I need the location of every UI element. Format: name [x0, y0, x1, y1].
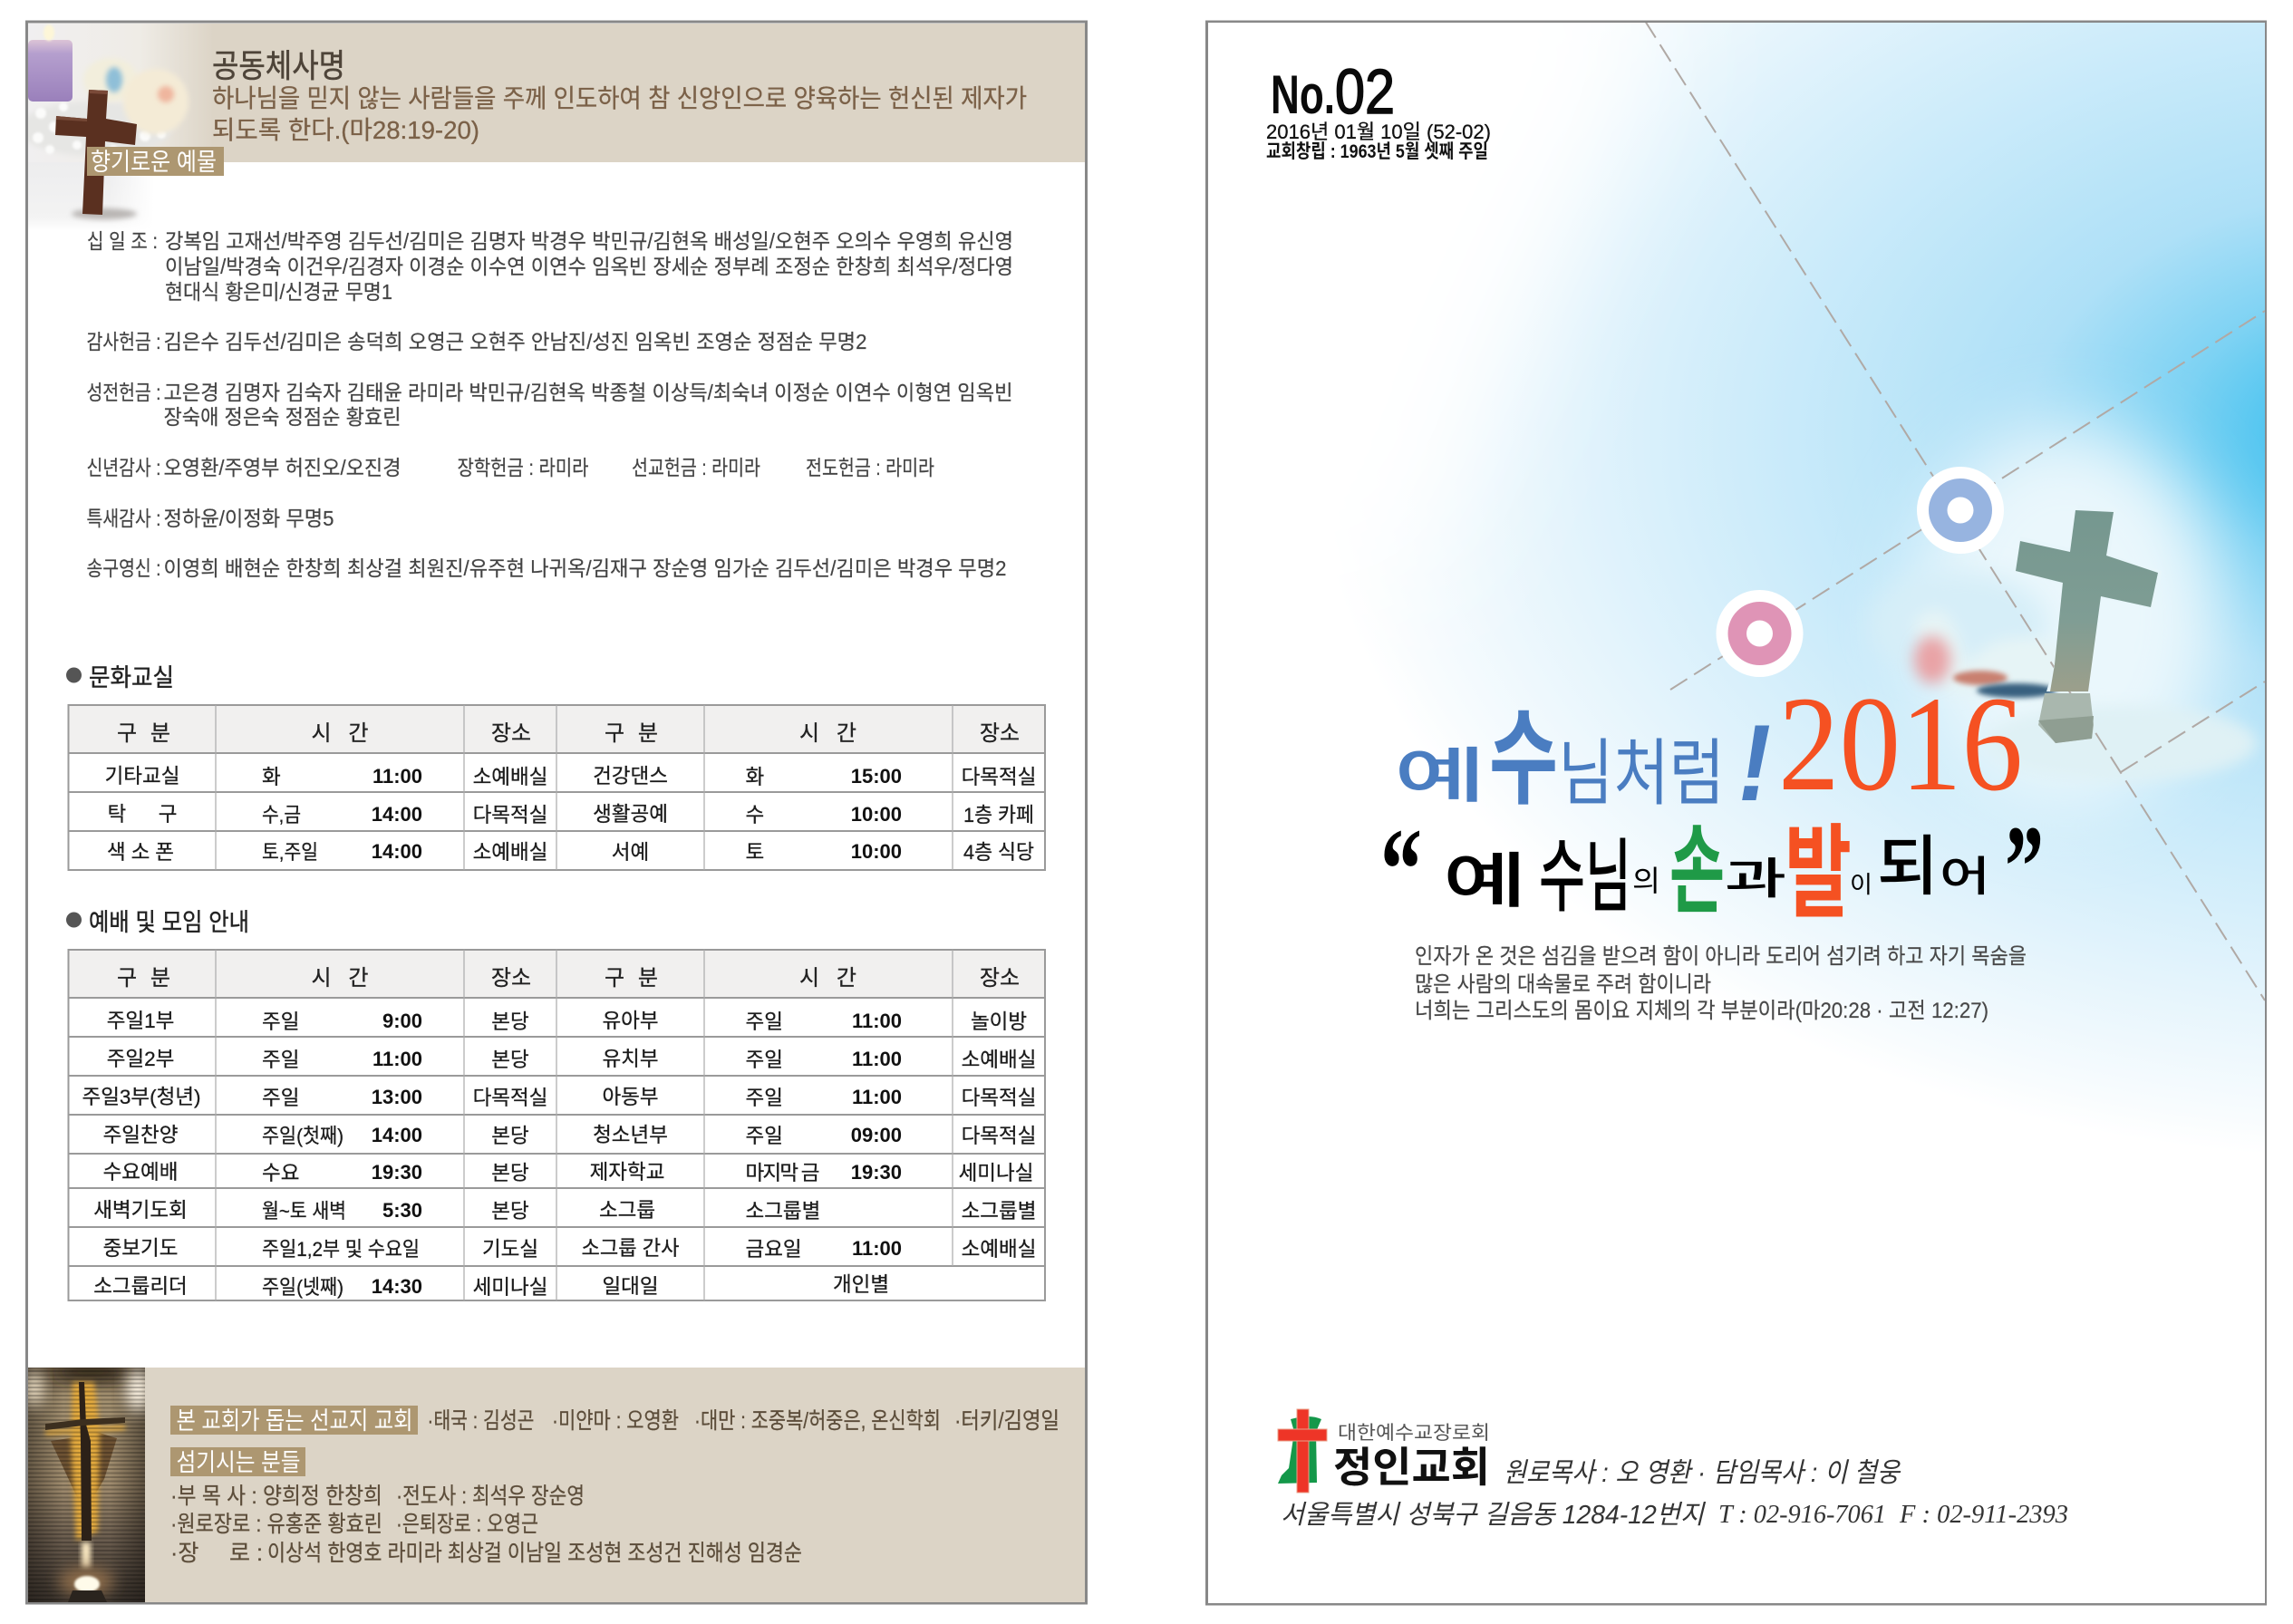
table row: 탁구: 수,금: [262, 804, 301, 826]
table header row: 구 분: [117, 966, 170, 991]
table row: 주일2부: 11:00: [372, 1048, 422, 1070]
text: address and contact: [1281, 1500, 2068, 1530]
table row: 소그룹리더: 주일(넷째): [262, 1276, 343, 1299]
table row: 색소폰: 10:00: [851, 840, 902, 863]
tag: 본 교회가 돕는 선교지 교회: 본 교회가 돕는 선교지 교회: [176, 1407, 413, 1435]
text block: offering names: 정하윤/이정화 무명5: [163, 507, 334, 530]
text: address and contact: 서울특별시 성북구 길음동 1284-12번지: [1281, 1501, 1706, 1530]
table row: 주일3부(청년): 다목적실: [473, 1087, 547, 1109]
table row: 중보기도: 11:00: [852, 1237, 902, 1260]
table row: 주일3부(청년): [82, 1086, 1036, 1109]
table row: 주일1부: 주일: [262, 1010, 299, 1033]
table row: 주일2부: 본당: [491, 1049, 529, 1071]
church denomination: 대한예수교장로회: [1338, 1423, 1490, 1444]
text block: offering names: 십 일 조 :: [87, 229, 158, 253]
table row: 주일1부: 주일1부: [107, 1010, 174, 1032]
table row: 탁구: 10:00: [851, 803, 902, 826]
dashed lines: [1645, 21, 2265, 1000]
table header row: 시 간: [312, 966, 368, 991]
table row: 주일1부: 주일: [745, 1010, 783, 1033]
table row: 탁구: 탁 구: [107, 803, 178, 826]
table row: 주일3부(청년): 아동부: [602, 1086, 659, 1108]
table row: 주일1부: 9:00: [382, 1010, 422, 1032]
subtitle: 예수님의 손과 발이 되어: 의: [1632, 858, 1660, 900]
table row: 색소폰: 토: [745, 841, 764, 864]
text: issue date: 교회창립 : 1963년 5월 셋째 주일: [1266, 141, 1488, 162]
table row: 색소폰: 토,주일: [262, 841, 318, 864]
table: 예배 및 모임 안내: [69, 950, 1045, 1300]
table row: 수요예배: [103, 1161, 1033, 1184]
table row: 수요예배: 수요: [262, 1162, 299, 1184]
table row: 색소폰: [107, 840, 1034, 864]
table row: 새벽기도회: 5:30: [382, 1199, 422, 1222]
table row: 주일찬양: 주일(첫째): [262, 1125, 343, 1147]
table row: 기타교실: 건강댄스: [593, 765, 668, 788]
panel: right cover page: [1133, 0, 2266, 1604]
table row: 소그룹리더: 소그룹리더: [93, 1275, 188, 1298]
table header row: 장소: [491, 721, 531, 746]
table row: 주일2부: 주일2부: [107, 1048, 174, 1070]
text: staff list: ·부 목 사 : 양희정 한창희: [170, 1484, 382, 1509]
table row: 탁구: 생활공예: [593, 803, 668, 826]
table row: 주일2부: 소예배실: [962, 1049, 1036, 1071]
table header row: 장소: [491, 966, 531, 991]
text: staff list: ·장: [170, 1541, 198, 1566]
table row: 주일1부: [107, 1010, 1027, 1033]
text: staff list: [170, 1484, 802, 1566]
text block: offering names: 고은경 김명자 김숙자 김태윤 라미라 박민규/김현옥 박종철 이상득/최숙녀 이정순 이연수 이형연 임옥빈: [163, 381, 1013, 404]
table row: 중보기도: 소그룹 간사: [582, 1237, 680, 1260]
subtitle: 예수님의 손과 발이 되어: 과: [1725, 843, 1786, 906]
table row: 탁구: [107, 803, 1034, 826]
table row: 중보기도: [103, 1237, 1036, 1261]
subtitle: 예수님의 손과 발이 되어: “: [1380, 805, 1422, 935]
table row: 주일1부: 11:00: [852, 1010, 902, 1032]
subtitle: 예수님의 손과 발이 되어: 손: [1669, 792, 1725, 933]
table row: 주일1부: 유아부: [602, 1010, 659, 1032]
image: candle and wooden cross: [28, 24, 195, 224]
tag: 향기로운 예물: 향기로운 예물: [91, 149, 217, 176]
table row: 새벽기도회: 소그룹별: [962, 1200, 1036, 1223]
table row: 주일2부: 유치부: [602, 1048, 659, 1070]
table row: 수요예배: 수요예배: [103, 1161, 178, 1184]
table row: 새벽기도회: 소그룹: [599, 1199, 655, 1222]
table row: 기타교실: 화: [262, 766, 281, 788]
text: bible verse: 많은 사람의 대속물로 주려 함이니라: [1415, 972, 1711, 997]
title: 예수님처럼! 2016: 2016: [1778, 669, 2023, 819]
table row: 소그룹리더: 세미나실: [473, 1276, 547, 1299]
table row: 소그룹리더: [93, 1273, 889, 1299]
title: 예수님처럼! 2016: 수: [1489, 675, 1558, 826]
table row: 주일찬양: 본당: [491, 1125, 529, 1147]
text: mission statement: 되도록 한다.(마28:19-20): [212, 116, 479, 144]
table row: 중보기도: 금요일: [745, 1238, 802, 1261]
table header row: [117, 721, 1020, 746]
table row: 주일2부: 주일: [745, 1049, 783, 1071]
table row: 주일3부(청년): 다목적실: [962, 1087, 1036, 1109]
image: open book: [1912, 610, 2257, 781]
table row: 중보기도: 중보기도: [103, 1237, 178, 1260]
text: staff list: 이상석 한영호 라미라 최상걸 이남일 조성현 조성건 진해성 임경순: [267, 1541, 802, 1566]
subtitle: 예수님의 손과 발이 되어: [1380, 791, 2044, 938]
table row: 주일3부(청년): 11:00: [852, 1086, 902, 1108]
text: address and contact: T : 02-916-7061: [1718, 1500, 1886, 1529]
table row: 주일찬양: 다목적실: [962, 1125, 1036, 1147]
text: pastors: 원로목사 : 오 영환 · 담임목사 : 이 철웅: [1504, 1458, 1901, 1488]
text: issue date: [1266, 121, 1491, 162]
text: mission countries: ·대만 : 조중복/허중은, 온신학회: [694, 1408, 941, 1434]
subtitle: 예수님의 손과 발이 되어: 수님: [1539, 813, 1631, 928]
table header row: 장소: [980, 721, 1020, 746]
table row: 수요예배: 제자학교: [590, 1161, 664, 1184]
table row: 색소폰: 4층 식당: [963, 841, 1034, 864]
table row: 탁구: 다목적실: [473, 804, 547, 826]
table header row: 시 간: [312, 721, 368, 746]
table row: 기타교실: 화: [745, 766, 764, 788]
table row: 수요예배: 19:30: [851, 1161, 902, 1184]
title: 예수님처럼! 2016: 님처럼: [1558, 715, 1725, 820]
table row: 새벽기도회: 소그룹별: [745, 1200, 820, 1223]
text: staff list: 로 :: [229, 1541, 263, 1566]
table header row: 구 분: [605, 966, 658, 991]
table row: 주일3부(청년): 주일: [262, 1087, 299, 1109]
text block: offering names: 강복임 고재선/박주영 김두선/김미은 김명자 박경우 박민규/김현옥 배성일/오현주 오의수 우영희 유신영: [165, 229, 1013, 253]
table row: 주일찬양: 주일찬양: [103, 1124, 178, 1146]
table row: 기타교실: 다목적실: [962, 766, 1036, 788]
panel: left page: [18, 22, 1086, 1603]
title: 예수님처럼! 2016: 예: [1394, 728, 1486, 815]
text: issue date: 2016년 01월 10일 (52-02): [1266, 121, 1491, 143]
subtitle: 예수님의 손과 발이 되어: 예: [1443, 833, 1527, 920]
text block: offering names: 감사헌금 :: [87, 330, 161, 353]
table row: 새벽기도회: 본당: [491, 1200, 529, 1223]
table row: 탁구: 1층 카페: [963, 804, 1034, 826]
table row: 중보기도: 주일1,2부 및 수요일: [262, 1238, 420, 1261]
text block: offering names: 김은수 김두선/김미은 송덕희 오영근 오현주 안남진/성진 임옥빈 조영순 정점순 무명2: [163, 330, 866, 353]
table header row: 구 분: [117, 721, 170, 746]
heading: 예배 및 모임 안내: 예배 및 모임 안내: [89, 909, 249, 936]
table row: 새벽기도회: 새벽기도회: [93, 1199, 188, 1222]
text: mission countries: ·태국 : 김성곤: [428, 1408, 535, 1434]
subtitle: 예수님의 손과 발이 되어: ”: [2005, 802, 2044, 933]
background: blue sky gradient: [1133, 0, 2265, 1603]
heading: 문화교실: 문화교실: [89, 664, 174, 691]
text: mission statement: 하나님을 믿지 않는 사람들을 주께 인도하여 참 신앙인으로 양육하는 헌신된 제자가: [212, 84, 1027, 112]
text block: offering names: 신년감사 :: [87, 456, 161, 479]
table row: 색소폰: 14:00: [372, 840, 422, 863]
title: 예수님처럼! 2016: [1394, 669, 2023, 826]
text: mission countries: [428, 1408, 1059, 1434]
table row: 소그룹리더: 개인별: [833, 1273, 889, 1296]
table header row: [117, 966, 1020, 991]
title: 예수님처럼! 2016: !: [1738, 702, 1771, 824]
table row: 소그룹리더: 14:30: [372, 1275, 422, 1298]
table: 문화교실: [69, 705, 1045, 870]
text block: offering names: 특새감사 :: [87, 507, 161, 530]
text block: offering names: 현대식 황은미/신경균 무명1: [165, 280, 392, 304]
table row: 새벽기도회: 월~토 새벽: [262, 1200, 346, 1223]
text block: offering names: 오영환/주영부 허진오/오진경: [163, 456, 401, 479]
text block: offering names: 이영희 배현순 한창희 최상걸 최원진/유주현 나귀옥/김재구 장순영 임가순 김두선/김미은 박경우 무명2: [163, 556, 1006, 580]
table row: 주일2부: [107, 1048, 1036, 1071]
image: lit cross: [25, 1363, 150, 1602]
table row: 주일1부: 놀이방: [971, 1010, 1027, 1033]
table row: 중보기도: 소예배실: [962, 1238, 1036, 1261]
table row: 수요예배: 19:30: [372, 1161, 422, 1184]
table row: 주일1부: 본당: [491, 1010, 529, 1033]
issue number: No.: [1271, 64, 1335, 125]
text: bible verse: 너희는 그리스도의 몸이요 지체의 각 부분이라(마20:28 · 고전 12:27): [1415, 999, 1988, 1023]
text block: offering names: 선교헌금 : 라미라: [632, 456, 760, 479]
table row: 새벽기도회: [93, 1199, 1036, 1223]
table row: 주일찬양: 청소년부: [593, 1124, 668, 1146]
icon: pink ring: [1717, 590, 1804, 677]
text block: offering names: 장숙애 정은숙 정점순 황효린: [163, 405, 401, 429]
table row: 중보기도: 기도실: [482, 1238, 538, 1261]
text: bible verse: 인자가 온 것은 섬김을 받으려 함이 아니라 도리어 섬기려 하고 자기 목숨을: [1415, 944, 2027, 969]
table row: 주일찬양: 09:00: [851, 1124, 902, 1146]
text block: offering names: 전도헌금 : 라미라: [806, 456, 934, 479]
text: mission countries: ·터키/김영일: [954, 1408, 1059, 1434]
table row: 수요예배: 본당: [491, 1162, 529, 1184]
text: address and contact: F : 02-911-2393: [1899, 1500, 2068, 1529]
table row: 색소폰: 소예배실: [473, 841, 547, 864]
table row: 기타교실: [105, 765, 1036, 788]
table row: 주일3부(청년): 13:00: [372, 1086, 422, 1108]
table row: 탁구: 14:00: [372, 803, 422, 826]
text: mission countries: ·미얀마 : 오영환: [552, 1408, 679, 1434]
text block: offering names: 송구영신 :: [87, 556, 161, 580]
table row: 주일찬양: 주일: [745, 1125, 783, 1147]
subtitle: 예수님의 손과 발이 되어: 발: [1785, 791, 1852, 938]
text: mission statement: [212, 84, 1027, 144]
table row: 기타교실: 기타교실: [105, 765, 179, 788]
logo: church cross and scroll: [1278, 1409, 1327, 1493]
text block: offering names: 장학헌금 : 라미라: [457, 456, 589, 479]
table row: 색소폰: 색 소 폰: [107, 841, 174, 864]
table header row: 시 간: [799, 966, 856, 991]
table row: 주일3부(청년): 주일3부(청년): [82, 1086, 201, 1108]
table row: 주일2부: 주일: [262, 1049, 299, 1071]
table row: 소그룹리더: 일대일: [602, 1275, 659, 1298]
text: bible verse: [1415, 944, 2027, 1023]
text block: offering names: 성전헌금 :: [87, 381, 161, 404]
table row: 탁구: 수: [745, 804, 764, 826]
text: staff list: ·전도사 : 최석우 장순영: [396, 1484, 585, 1509]
table row: 기타교실: 15:00: [851, 765, 902, 788]
church name: 정인교회: [1333, 1444, 1490, 1491]
icon: blue ring: [1917, 467, 2004, 554]
table header row: 구 분: [605, 721, 658, 746]
table header row: 장소: [980, 966, 1020, 991]
text block: offering names: [87, 229, 1013, 580]
table row: 색소폰: 서예: [612, 841, 649, 864]
text: staff list: ·은퇴장로 : 오영근: [396, 1512, 538, 1537]
table row: 주일찬양: 14:00: [372, 1124, 422, 1146]
subtitle: 예수님의 손과 발이 되어: 이: [1850, 866, 1872, 900]
image: metal cross: [2016, 505, 2162, 743]
table row: 주일2부: 11:00: [852, 1048, 902, 1070]
issue number: 02: [1335, 56, 1395, 127]
table row: 기타교실: 소예배실: [473, 766, 547, 788]
table header row: 시 간: [799, 721, 856, 746]
table row: 주일찬양: [103, 1124, 1036, 1147]
subtitle: 예수님의 손과 발이 되어: 어: [1940, 844, 1990, 904]
table row: 기타교실: 11:00: [372, 765, 422, 788]
panel: missionaries and servers: [25, 1363, 1085, 1602]
table row: 수요예배: 세미나실: [959, 1162, 1033, 1184]
heading: 공동체사명: 공동체사명: [212, 47, 345, 84]
text block: offering names: 이남일/박경숙 이건우/김경자 이경순 이수연 이연수 임옥빈 장세순 정부례 조정순 한창희 최석우/정다영: [165, 255, 1013, 278]
table row: 주일3부(청년): 주일: [745, 1087, 783, 1109]
panel: mission header band: [18, 24, 1085, 235]
table row: 수요예배: 마지막 금: [745, 1162, 819, 1184]
tag: 섬기시는 분들: 섬기시는 분들: [176, 1449, 301, 1476]
text: staff list: ·원로장로 : 유홍준 황효린: [170, 1512, 382, 1537]
subtitle: 예수님의 손과 발이 되어: 되: [1877, 813, 1939, 908]
